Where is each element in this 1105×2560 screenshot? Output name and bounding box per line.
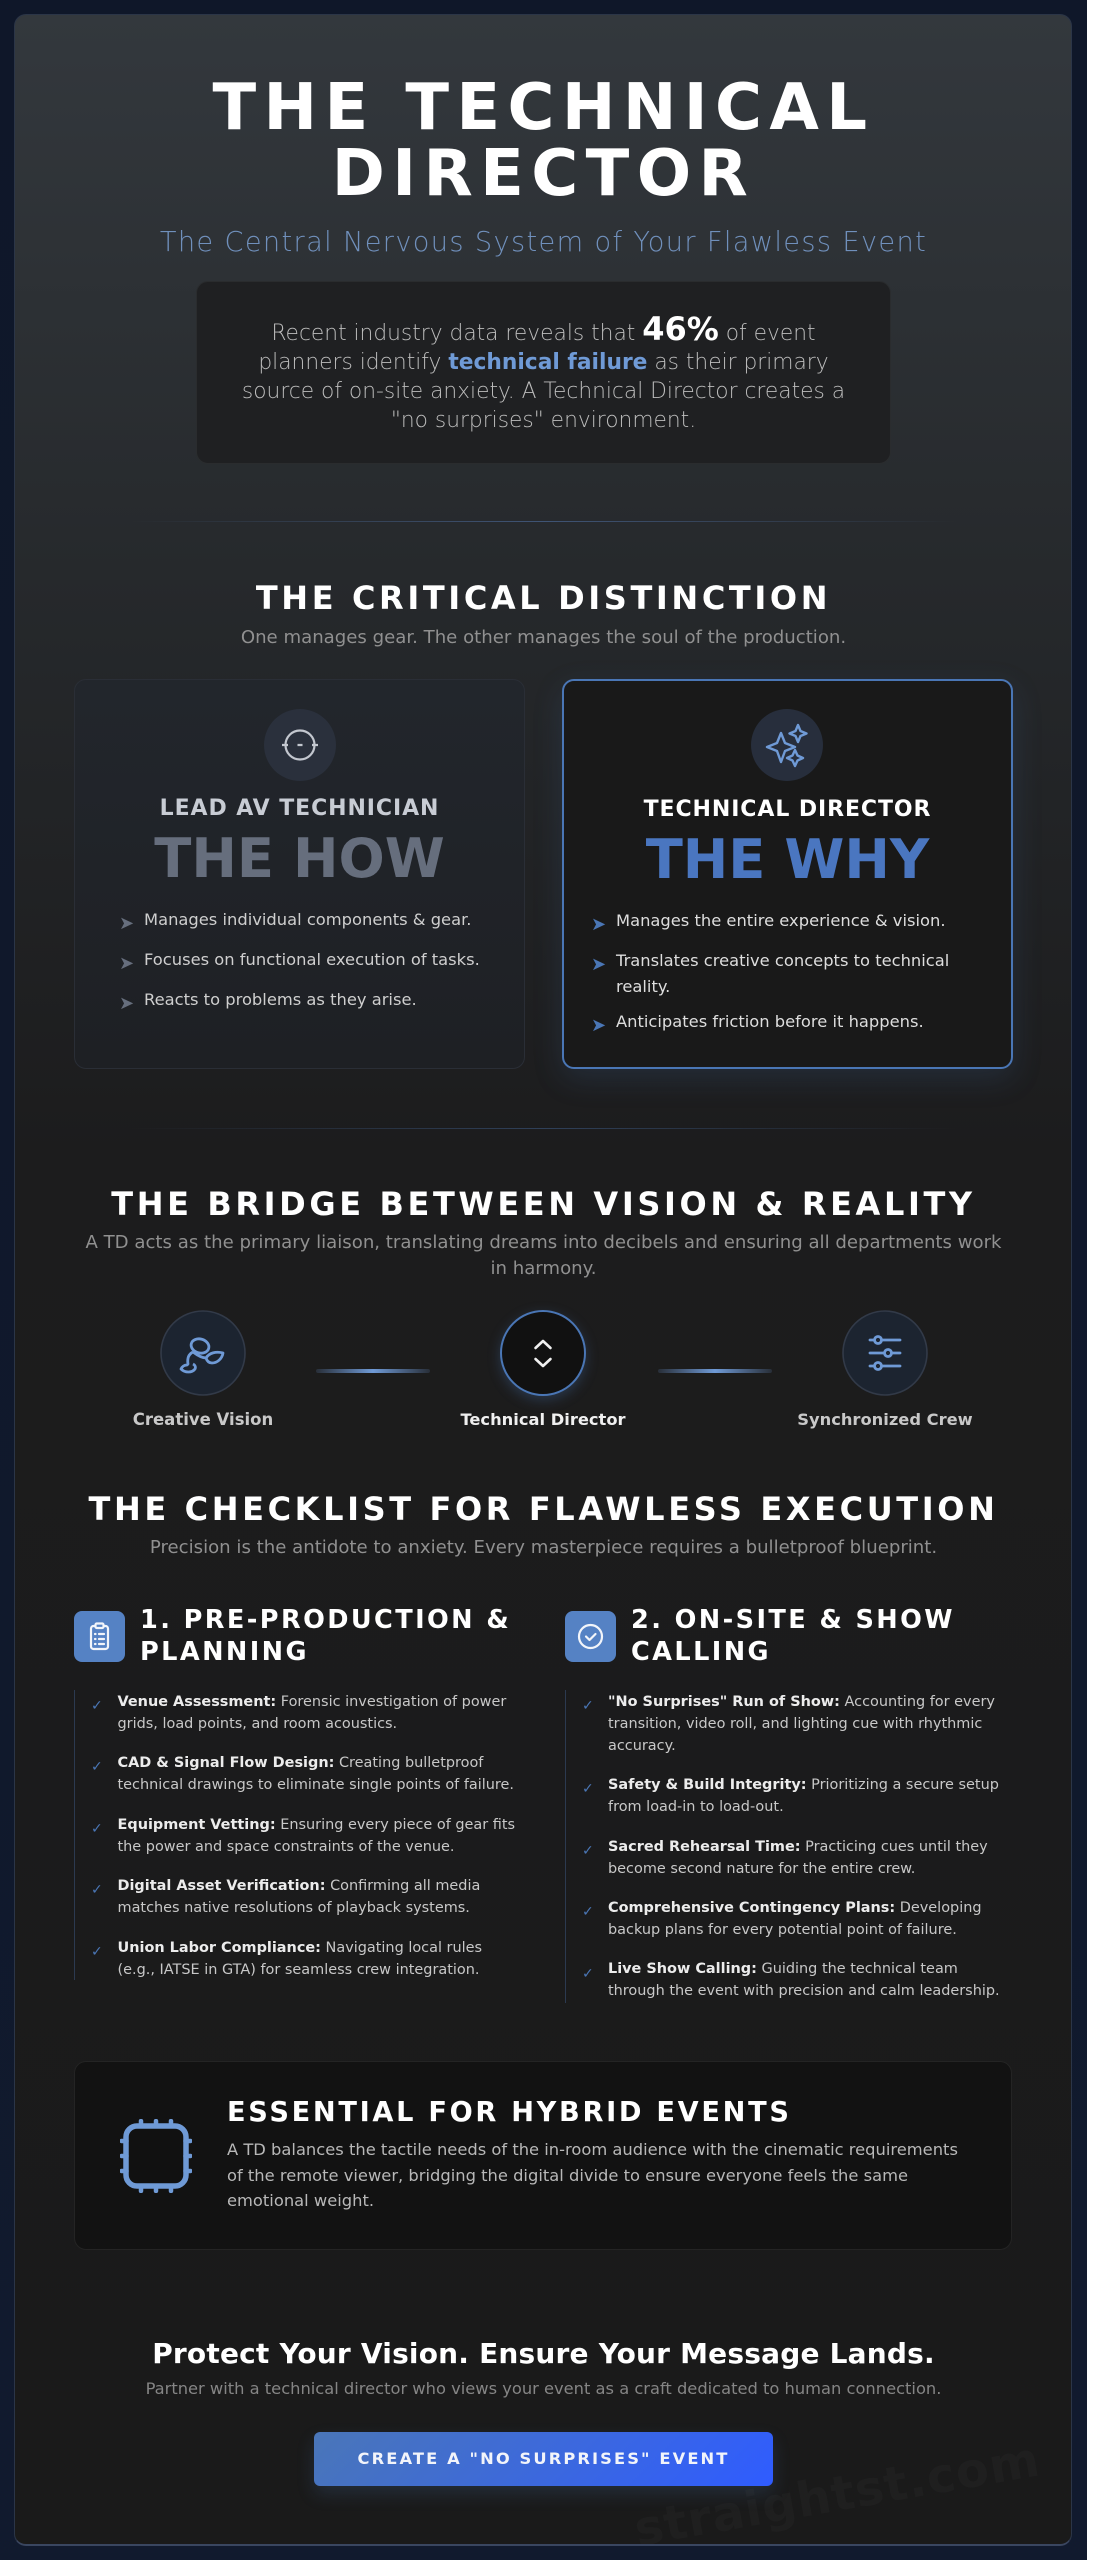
item: ✓ xyxy=(91,1698,103,1714)
panel: lead AV technician: ➤ xyxy=(119,953,134,974)
list: on-site: Sacred Rehearsal Time: Practicing cues until they xyxy=(608,1839,988,1855)
column: pre-production xyxy=(74,1605,515,1980)
node: technical director xyxy=(460,1309,626,1429)
list: pre-production: grids, load points, and room acoustics. xyxy=(118,1716,397,1732)
panel: lead AV technician: ➤ xyxy=(119,913,134,934)
list: pre-production: (e.g., IATSE in GTA) for seamless crew integration. xyxy=(118,1962,479,1978)
panel: technical director: Anticipates friction before it happens. xyxy=(616,1012,924,1031)
list: director duties xyxy=(591,911,949,1036)
list: pre-production: Digital Asset Verification: Confirming all media xyxy=(118,1878,480,1894)
subheading: bridge xyxy=(85,1232,1002,1279)
panel: lead AV technician: Focuses on functional execution of tasks. xyxy=(144,950,480,969)
list: pre-production: matches native resolutions of playback systems. xyxy=(118,1900,470,1916)
subheading: bridge: A TD acts as the primary liaison, translating dreams into decibels and ensuring all departments work xyxy=(85,1232,1002,1253)
icon: sparkles xyxy=(751,709,823,781)
label: creative vision: Creative Vision xyxy=(133,1410,273,1429)
list: pre-production xyxy=(74,1690,534,1980)
list: on-site: "No Surprises" Run of Show: Accounting for every xyxy=(608,1694,995,1710)
CTA subtext: Partner with a technical director who views your event as a craft dedicated to human connection. xyxy=(146,2379,941,2398)
text: hybrid: emotional weight. xyxy=(227,2191,374,2210)
list: on-site: ✓ xyxy=(582,1904,594,1920)
text: hybrid: A TD balances the tactile needs of the in-room audience with the cinematic requirements xyxy=(227,2140,958,2159)
subheading: critical distinction: One manages gear. The other manages the soul of the production. xyxy=(241,627,846,648)
intro text xyxy=(242,310,845,433)
panel: lead AV technician: Reacts to problems as they arise. xyxy=(144,990,417,1009)
divider xyxy=(130,1128,957,1129)
diagram: bridge flow xyxy=(133,1309,973,1429)
item: ✓ xyxy=(582,1698,594,1714)
subtitle: The Central Nervous System of Your Flawless Event xyxy=(160,227,927,258)
list: pre-production: Equipment Vetting: Ensuring every piece of gear fits xyxy=(118,1817,515,1833)
list: pre-production: Union Labor Compliance: Navigating local rules xyxy=(118,1940,482,1956)
heading: on-site xyxy=(631,1605,955,1667)
title xyxy=(212,71,874,211)
CTA button xyxy=(314,2432,773,2486)
label: synchronized crew: Synchronized Crew xyxy=(797,1410,973,1429)
list: on-site: through the event with precision and calm leadership. xyxy=(608,1983,1000,1999)
panel: lead AV technician: Manages individual components & gear. xyxy=(144,910,471,929)
heading: on-site: 2. ON-SITE & SHOW xyxy=(631,1605,955,1635)
intro text: "no surprises" environment. xyxy=(391,408,696,433)
panel: technical director: Translates creative concepts to technical xyxy=(616,951,949,970)
heading: pre-production: 1. PRE-PRODUCTION & xyxy=(140,1605,511,1635)
list: pre-production: ✓ xyxy=(91,1759,103,1775)
text: hybrid: of the remote viewer, bridging the digital divide to ensure everyone feels the same xyxy=(227,2166,908,2185)
panel: technical director: reality. xyxy=(616,977,670,996)
big text: the why: THE WHY xyxy=(646,828,929,891)
label: technical director: TECHNICAL DIRECTOR xyxy=(644,797,931,822)
label: lead AV technician: LEAD AV TECHNICIAN xyxy=(160,796,439,821)
list: pre-production: ✓ xyxy=(91,1821,103,1837)
intro stat box xyxy=(196,281,891,464)
icon: chip xyxy=(120,2119,192,2193)
intro text: planners identify technical failure as their primary xyxy=(258,350,829,375)
panel: hybrid events xyxy=(74,2061,1012,2250)
list: on-site: become second nature for the entire crew. xyxy=(608,1861,915,1877)
list: pre-production: Venue Assessment: Forensic investigation of power xyxy=(118,1694,506,1710)
list: on-site: Safety & Build Integrity: Prioritizing a secure setup xyxy=(608,1777,999,1793)
list: on-site: accuracy. xyxy=(608,1738,676,1754)
panel: lead AV technician: ➤ xyxy=(119,993,134,1014)
icon: chevrons xyxy=(495,1309,591,1405)
heading: pre-production: PLANNING xyxy=(140,1637,309,1667)
list: pre-production: the power and space constraints of the venue. xyxy=(118,1839,454,1855)
connector xyxy=(316,1369,430,1373)
list: on-site: transition, video roll, and lighting cue with rhythmic xyxy=(608,1716,982,1732)
subheading: bridge: in harmony. xyxy=(490,1258,597,1279)
list: on-site xyxy=(565,1690,1025,2003)
icon: creative vision xyxy=(160,1310,246,1396)
panel: technical director: ➤ xyxy=(591,1015,606,1036)
panel: technical director xyxy=(562,679,1013,1069)
node: synchronized crew xyxy=(797,1310,973,1429)
title: THE TECHNICAL xyxy=(212,71,874,145)
intro text: source of on-site anxiety. A Technical Director creates a xyxy=(242,379,845,404)
connector xyxy=(658,1369,772,1373)
CTA button: CREATE A "NO SURPRISES" EVENT xyxy=(358,2449,729,2468)
list: pre-production: technical drawings to eliminate single points of failure. xyxy=(118,1777,514,1793)
label: technical director: Technical Director xyxy=(460,1410,626,1429)
heading: bridge: THE BRIDGE BETWEEN VISION & REALITY xyxy=(111,1185,976,1223)
list: technician duties xyxy=(119,910,480,1014)
subheading: checklist: Precision is the antidote to anxiety. Every masterpiece requires a bulletproof blueprint. xyxy=(150,1537,937,1558)
list: pre-production: ✓ xyxy=(91,1944,103,1960)
panel: technical director: Manages the entire experience & vision. xyxy=(616,911,946,930)
list: on-site: backup plans for every potential point of failure. xyxy=(608,1922,957,1938)
heading: critical distinction: THE CRITICAL DISTINCTION xyxy=(256,579,831,617)
list: pre-production: CAD & Signal Flow Design: Creating bulletproof xyxy=(118,1755,483,1771)
list: on-site: Live Show Calling: Guiding the technical team xyxy=(608,1961,958,1977)
list: on-site: ✓ xyxy=(582,1843,594,1859)
icon: sliders xyxy=(842,1310,928,1396)
divider xyxy=(130,521,957,522)
icon: circle target xyxy=(264,709,336,781)
heading: checklist: THE CHECKLIST FOR FLAWLESS EXECUTION xyxy=(88,1490,998,1528)
big text: the how: THE HOW xyxy=(154,827,445,890)
heading: hybrid: ESSENTIAL FOR HYBRID EVENTS xyxy=(227,2097,792,2128)
icon: clipboard xyxy=(74,1611,125,1662)
text: hybrid xyxy=(227,2140,958,2210)
list: on-site: ✓ xyxy=(582,1781,594,1797)
list: on-site: Comprehensive Contingency Plans: Developing xyxy=(608,1900,982,1916)
heading: on-site: CALLING xyxy=(631,1637,771,1667)
icon: check circle xyxy=(565,1611,616,1662)
panel: lead AV technician xyxy=(74,679,525,1069)
CTA heading: Protect Your Vision. Ensure Your Message Lands. xyxy=(152,2337,935,2370)
heading: pre-production xyxy=(140,1605,511,1667)
list: on-site: ✓ xyxy=(582,1966,594,1982)
title: DIRECTOR xyxy=(332,137,755,211)
list: pre-production: ✓ xyxy=(91,1882,103,1898)
panel: technical director: ➤ xyxy=(591,914,606,935)
panel: technical director: ➤ xyxy=(591,954,606,975)
list: on-site: from load-in to load-out. xyxy=(608,1799,784,1815)
intro text: Recent industry data reveals that 46% of event xyxy=(271,310,816,348)
column: on-site xyxy=(565,1605,1000,2003)
node: creative vision xyxy=(133,1310,273,1429)
